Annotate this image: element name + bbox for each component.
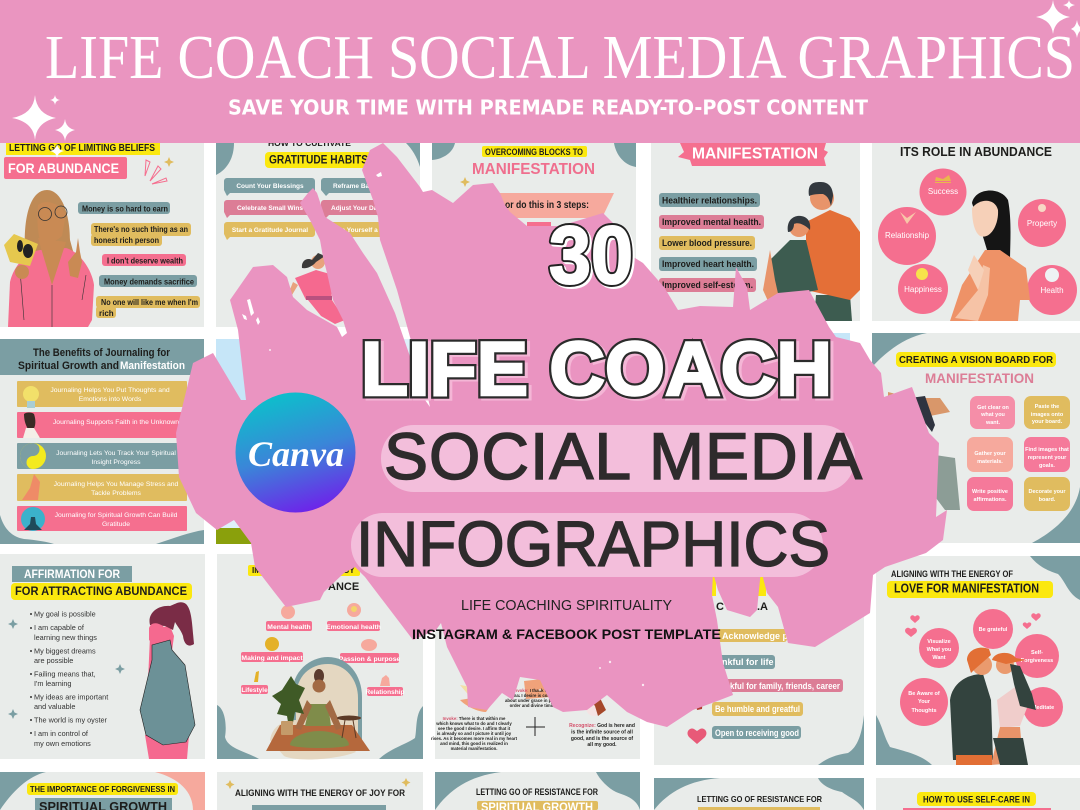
panel: importance of energy wheel: Passion & purpose (339, 656, 400, 663)
panel: letting go of limiting beliefs: honest rich person (94, 236, 159, 245)
panel: affirmation for attracting abundance: my own emotions (34, 739, 91, 748)
panel: affirmation for attracting abundance: I am capable of (34, 623, 85, 632)
panel: overcoming blocks to manifestation: OVERCOMING BLOCKS TO (485, 147, 583, 157)
illustration: couple (763, 182, 860, 321)
panel: creating a vision board: board. (1039, 497, 1056, 503)
panel: gratitude statements: nkful for life (722, 657, 774, 667)
panel: creating a vision board: Gather your (974, 451, 1006, 457)
icon: sparkles right (1036, 0, 1080, 38)
panel: manifestation benefits: MANIFESTATION (692, 146, 818, 162)
panel: benefits of journaling (0, 339, 204, 544)
panel: manifestation benefits: Improved mental health. (662, 217, 761, 227)
panel: love for manifestation: Thoughts (911, 708, 937, 714)
panel: manifestation benefits: Improved self-esteem. (662, 280, 753, 290)
panel: benefits of journaling: Journaling Lets You Track Your Spiritual (56, 450, 176, 457)
panel: letting go of limiting beliefs (0, 143, 204, 327)
icon: hearts (688, 729, 706, 744)
panel: gratitude statements: Acknowledge posit (722, 631, 804, 641)
panel: gratitude statements: C (716, 601, 724, 613)
subtitle: SAVE YOUR TIME WITH PREMADE READY-TO-POST CONTENT (228, 96, 868, 120)
panel: affirmation for attracting abundance: The world is my oyster (34, 716, 108, 724)
panel: three-step text card: and mind, this good is realized in (440, 741, 508, 746)
panel: gratitude habits: Celebrate Small Wins (237, 205, 303, 212)
logo: canva: Canva (248, 434, 344, 474)
text: instagram and facebook template: INSTAGRAM & FACEBOOK POST TEMPLATE (412, 626, 721, 642)
headline: 30: 30 (551, 212, 635, 303)
panel: three-step text card: is the infinite source of all (571, 730, 633, 736)
illustration: couple nose to nose (950, 648, 1036, 765)
panel: creating a vision board: materials. (977, 459, 1003, 465)
panel: benefits of journaling: Journaling Helps You Manage Stress and (54, 481, 179, 488)
panel: love for manifestation: What you (927, 647, 951, 653)
panel: affirmation for attracting abundance: My biggest dreams (34, 646, 96, 656)
panel: importance of energy wheel: Mental health (267, 624, 311, 631)
panel: affirmation for attracting abundance: AFFIRMATION FOR (24, 567, 120, 581)
panel: manifestation benefits: Lower blood pressure. (662, 238, 752, 248)
label: social media pill: SOCIAL MEDIA (384, 419, 862, 493)
headline: 30: 30 (549, 210, 633, 301)
banner (0, 0, 1080, 158)
panel: creating a vision board: Decorate your (1028, 489, 1066, 495)
panel: letting go of limiting beliefs: Money demands sacrifice (104, 278, 195, 286)
panel: letting go of limiting beliefs: Money is so hard to earn (82, 204, 168, 214)
panel: benefits of journaling: Tackle Problems (91, 490, 142, 497)
panel: love for manifestation: Be grateful (979, 627, 1008, 633)
panel: love for manifestation: Meditate (1032, 705, 1054, 711)
illustration: woman with cards (4, 190, 94, 327)
panel: its role in abundance: Property (1027, 219, 1057, 228)
panel: gratitude statements: kful for family, friends, career (730, 681, 840, 691)
panel: importance of energy wheel (217, 554, 423, 759)
panel: gratitude habits: Count Your Blessings (236, 183, 304, 190)
panel: affirmation for attracting abundance: My ideas are important (34, 692, 108, 702)
panel: bottom row forgiveness (0, 772, 205, 810)
panel: benefits of journaling: Spiritual Growth and (18, 360, 119, 372)
panel: three-step text card: rises. As it becomes more real in my heart (431, 736, 518, 741)
panel: partly hidden photo card (216, 333, 850, 544)
panel: creating a vision board: your board. (1032, 419, 1063, 425)
illustration: woman in jacket (140, 602, 195, 759)
panel: affirmation for attracting abundance (0, 554, 205, 759)
panel: love for manifestation: Forgiveness (1021, 658, 1053, 664)
panel: love for manifestation: LOVE FOR MANIFESTATION (894, 582, 1039, 596)
panel: letting go of limiting beliefs: I don't deserve wealth (107, 256, 183, 266)
panel: creating a vision board: CREATING A VISION BOARD FOR (899, 355, 1054, 366)
panel: creating a vision board: represent your (1028, 455, 1067, 461)
panel: three-step text card: Recognize: God is here and (569, 723, 635, 729)
panel: bottom row resistance two (654, 778, 864, 810)
panel: creating a vision board: want. (985, 420, 1000, 426)
panel: love for manifestation: ALIGNING WITH THE ENERGY OF (891, 569, 1013, 579)
illustration: person in pink (289, 253, 345, 324)
panel: overcoming blocks to manifestation (432, 143, 636, 327)
panel: manifestation benefits: Improved heart health. (662, 259, 754, 269)
panel: bottom row resistance one (435, 772, 640, 810)
panel: overcoming blocks to manifestation: MANIFESTATION (472, 161, 595, 178)
panel: benefits of journaling: Journaling Supports Faith in the Unknown (53, 419, 179, 426)
panel: three-step text card: good, and is the source of (571, 736, 633, 742)
panel: benefits of journaling: Insight Progress (91, 459, 141, 466)
panel: bottom row joy: ALIGNING WITH THE ENERGY OF JOY FOR (235, 788, 405, 799)
panel: gratitude statements (654, 555, 864, 765)
panel: love for manifestation: Be Aware of (908, 691, 940, 697)
panel: three-step text card: order and divine timing. (510, 703, 558, 708)
panel: bottom row joy (217, 772, 423, 810)
panel: gratitude statements: Be humble and greatful (715, 704, 800, 714)
panel: three-step text card: material manifestation. (451, 746, 497, 751)
panel: love for manifestation (876, 556, 1080, 765)
panel: bottom row resistance two: LETTING GO OF RESISTANCE FOR (697, 794, 822, 804)
illustration: woman thinking (888, 392, 960, 510)
panel: gratitude statements: .A (757, 601, 768, 613)
panel: creating a vision board: Get clear on (977, 405, 1010, 411)
panel: three-step text card: see the good I desire. I affirm that it (438, 726, 511, 731)
panel: three-step text card: what I desire is coming (509, 693, 558, 698)
panel: importance of energy wheel: Emotional health (326, 624, 381, 631)
panel: letting go of limiting beliefs: LETTING GO OF LIMITING BELIEFS (9, 143, 155, 154)
panel: importance of energy wheel: Lifestyle (241, 687, 268, 694)
icon: sparkles left (12, 95, 75, 158)
panel: creating a vision board: goals. (1039, 463, 1055, 469)
panel: gratitude habits: Give Yourself a (331, 227, 378, 234)
panel: three-step text card: all my good. (587, 742, 617, 748)
panel: gratitude habits: Start a Gratitude Journal (232, 227, 308, 234)
panel: bottom row forgiveness: THE IMPORTANCE OF FORGIVENESS IN (30, 784, 175, 794)
panel: gratitude habits: HOW TO CULTIVATE (268, 138, 351, 148)
panel: bottom row self-care (876, 778, 1080, 810)
panel: affirmation for attracting abundance: learning new things (34, 633, 97, 642)
panel: love for manifestation: Self- (1031, 650, 1043, 656)
panel: affirmation for attracting abundance: and valuable (34, 702, 75, 711)
panel: affirmation for attracting abundance: are possible (34, 656, 73, 665)
panel: its role in abundance: Health (1040, 286, 1064, 295)
panel: three-step text card: about under grace in perfect (505, 698, 564, 703)
text: life coaching spirituality: LIFE COACHING SPIRITUALITY (461, 598, 672, 614)
panel: three-step text card: is already so and I picture it until joy (437, 731, 512, 736)
panel: benefits of journaling: Gratitude (102, 521, 130, 528)
panel: benefits of journaling: Journaling Helps You Put Thoughts and (50, 387, 170, 394)
panel: love for manifestation: Want (932, 655, 946, 661)
panel: creating a vision board: Paste the (1035, 404, 1059, 410)
panel: bottom row resistance one: LETTING GO OF RESISTANCE FOR (476, 787, 598, 797)
headline: life coach: LIFE COACH (364, 329, 835, 414)
illustration: woman praying (950, 191, 1030, 321)
panel: gratitude habits (216, 138, 420, 327)
logo: canva (236, 392, 356, 512)
icon: floating hearts (905, 613, 1041, 637)
panel: creating a vision board: images onto (1031, 412, 1064, 418)
panel: letting go of limiting beliefs: No one will like me when I'm (101, 298, 198, 307)
panel: importance of energy wheel: Relationship (365, 689, 405, 696)
label: infographics pill: INFOGRAPHICS (356, 508, 830, 580)
panel: overcoming blocks to manifestation: or do this in 3 steps: (505, 200, 589, 211)
panel: its role in abundance: Happiness (904, 285, 942, 294)
panel: creating a vision board: Write positive (972, 489, 1008, 495)
headline: life coach: LIFE COACH (361, 327, 832, 412)
panel: importance of energy wheel: IMPORTANCE OF ENERGY (252, 566, 355, 575)
panel: benefits of journaling: Emotions into Words (79, 396, 142, 403)
panel: benefits of journaling: Manifestation (120, 360, 185, 372)
panel: benefits of journaling: Journaling for Spiritual Growth Can Build (55, 512, 178, 519)
panel: creating a vision board (872, 333, 1080, 543)
panel: love for manifestation: Visualize (927, 639, 951, 645)
panel: manifestation benefits: Healthier relationships. (662, 196, 757, 206)
panel: affirmation for attracting abundance: FOR ATTRACTING ABUNDANCE (15, 584, 187, 598)
panel: gratitude habits: Reframe Bad (333, 183, 373, 190)
panel: importance of energy wheel: ANCE (328, 581, 359, 593)
panel: its role in abundance: Relationship (885, 231, 930, 240)
panel: gratitude statements: Open to receiving good (715, 728, 799, 738)
panel: importance of energy wheel: Making and impact (241, 655, 303, 662)
panel: affirmation for attracting abundance: Failing means that, (34, 670, 96, 678)
panel: affirmation for attracting abundance: I'm learning (34, 679, 72, 688)
panel: creating a vision board: what you (980, 412, 1005, 418)
panel: gratitude habits: GRATITUDE HABITS (269, 154, 368, 166)
panel: its role in abundance (872, 143, 1080, 321)
panel: love for manifestation: Your (918, 699, 931, 705)
panel: three-step text card: Invoke: There is that within me (443, 716, 506, 721)
panel: letting go of limiting beliefs: There's no such thing as an (94, 225, 188, 234)
panel: three-step text card (431, 554, 640, 759)
panel: affirmation for attracting abundance: My goal is possible (34, 610, 96, 618)
headline: 30: 30 (549, 210, 633, 301)
panel: creating a vision board: Find images that (1025, 447, 1069, 453)
panel: its role in abundance: Success (928, 187, 958, 196)
headline: life coach: LIFE COACH (361, 327, 832, 412)
panel: creating a vision board: MANIFESTATION (925, 370, 1034, 386)
panel: letting go of limiting beliefs: FOR ABUNDANCE (8, 160, 119, 176)
pink paint brush stroke (176, 143, 947, 727)
panel: benefits of journaling: The Benefits of Journaling for (33, 347, 171, 359)
panel: manifestation benefits (651, 143, 860, 321)
panel: creating a vision board: affirmations. (973, 497, 1007, 503)
illustration: meditating woman (266, 657, 370, 759)
panel: three-step text card: which knows what to do and I clearly (435, 721, 512, 726)
panel: three-step text card: Invoke: I thank God, (513, 688, 555, 693)
panel: gratitude habits: Adjust Your Day (331, 205, 381, 212)
panel: letting go of limiting beliefs: rich (99, 309, 114, 318)
panel: affirmation for attracting abundance: I am in control of (34, 729, 89, 738)
panel: bottom row self-care: HOW TO USE SELF-CARE IN (923, 794, 1030, 806)
panel: its role in abundance: ITS ROLE IN ABUNDANCE (900, 145, 1052, 159)
